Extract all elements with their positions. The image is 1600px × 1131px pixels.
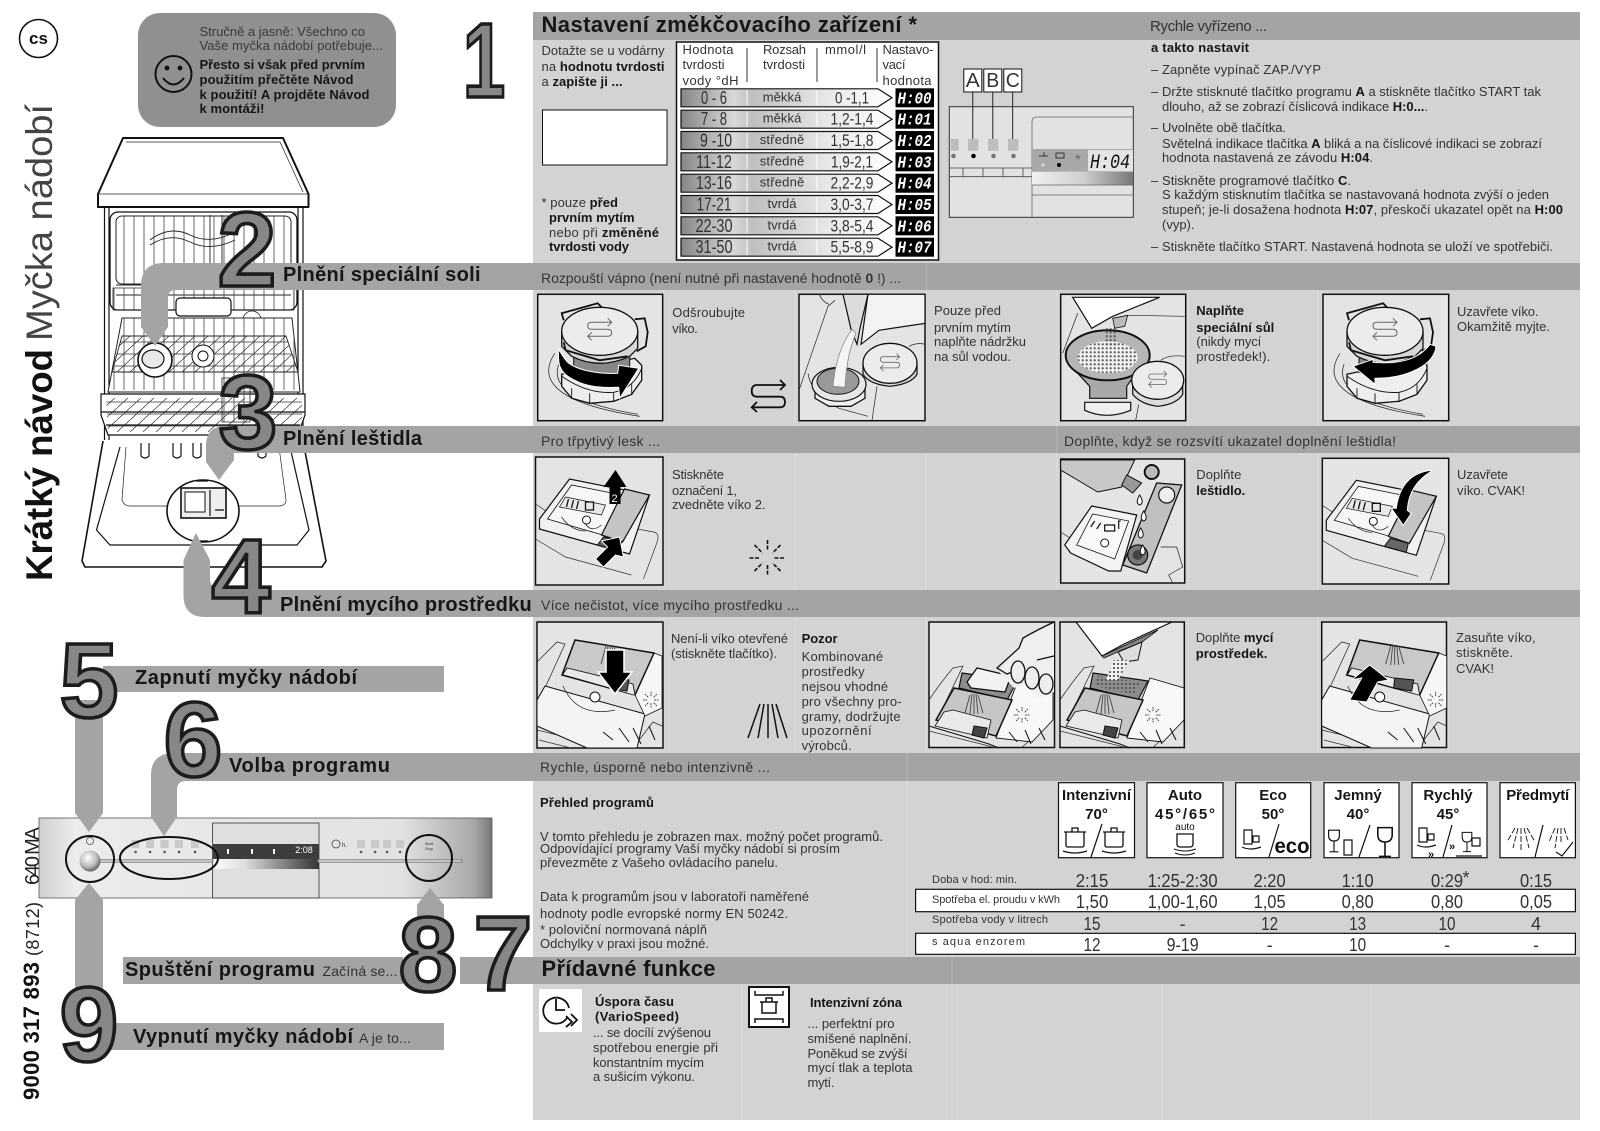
row: aqua sensor: - xyxy=(1267,935,1273,955)
step: open rinse aid lid: Stiskněte xyxy=(672,467,724,482)
program overview text: V tomto přehledu je zobrazen max. možný počet programů. xyxy=(540,829,883,844)
vertical part number xyxy=(19,826,44,1100)
connector bar: step 3: Plnění leštidla xyxy=(283,428,423,450)
footnote: only before first wash: prvním mytím xyxy=(549,210,634,225)
row: energy: 0,80 xyxy=(1431,892,1463,912)
table row 7-8: 7 - 8 xyxy=(701,109,727,129)
buttons diagram A B C and display: * xyxy=(1075,151,1081,167)
connector bar: step 3: Pro třpytivý lesk ... xyxy=(541,433,660,449)
footnote: only before first wash xyxy=(542,195,659,254)
row: duration: * xyxy=(1462,868,1470,888)
row: duration: 1:10 xyxy=(1342,871,1374,891)
text: ask the water company: a zapište ji ... xyxy=(542,74,622,89)
step: close rinse aid lid: víko. CVAK! xyxy=(1457,483,1525,498)
table row 11-12: 11-12 xyxy=(696,152,732,172)
connector bar: step 8 xyxy=(123,888,444,984)
program overview text: * poloviční normovaná náplň xyxy=(540,922,707,937)
illustration: water pouring xyxy=(799,294,925,421)
table row 0-6 xyxy=(681,88,934,109)
vertical part number: (8712) xyxy=(23,902,43,956)
instructions: set softener: Světelná indikace tlačítka A bliká a na číslicové indikaci se zobrazí xyxy=(1162,136,1542,151)
function: VarioSpeed: ... se docílí zvýšenou xyxy=(593,1025,711,1040)
row: water: 12 xyxy=(1261,914,1278,934)
warning text: combined detergents: nejsou vhodné xyxy=(802,679,888,694)
row: aqua sensor: 12 xyxy=(1084,935,1100,955)
callout: read the manuals: k použití! A projděte Návod xyxy=(200,87,370,102)
step: fill with water: Pouze před xyxy=(934,303,1001,318)
row: duration: 2:15 xyxy=(1076,871,1108,891)
instructions: set softener: Stiskněte programové tlačítko C. xyxy=(1162,173,1351,188)
step: close cap: Uzavřete víko. xyxy=(1457,304,1538,319)
program: Rychlý xyxy=(1412,783,1487,861)
header bar: softener: Rychle vyřízeno ... xyxy=(1150,18,1267,35)
table row 22-30: 3,8-5,4 xyxy=(830,216,874,235)
icon: intensive zone xyxy=(749,987,789,1027)
label C: C xyxy=(1006,70,1020,92)
step: fill special salt xyxy=(1061,294,1274,421)
program: Auto: Auto xyxy=(1168,787,1202,804)
instructions: set softener: – xyxy=(1151,84,1159,99)
program: Rychlý: 45° xyxy=(1437,806,1459,823)
table row 7-8: 1,2-1,4 xyxy=(830,110,874,129)
connector bar: step 3: Doplňte, když se rozsvítí ukazatel doplnění leštidla! xyxy=(1064,433,1396,449)
row: duration xyxy=(1076,868,1552,891)
table row 13-16: 13-16 xyxy=(696,173,732,193)
panel backgrounds xyxy=(533,40,1580,1120)
program: Předmytí xyxy=(1500,783,1575,858)
step: close rinse aid lid xyxy=(1322,458,1525,584)
function: intensive zone xyxy=(749,987,913,1090)
step: open detergent lid: Není-li víko otevřené xyxy=(671,631,788,646)
note box xyxy=(542,110,667,165)
table row 22-30: 22-30 xyxy=(696,216,732,236)
step: fill with water: naplňte nádržku xyxy=(934,334,1026,349)
program: Jemný xyxy=(1324,783,1399,858)
instructions: set softener: stupeň; je-li dosažena hodnota H:07, přeskočí ukazatel opět na H:00 xyxy=(1162,202,1563,217)
function: VarioSpeed: (VarioSpeed) xyxy=(595,1009,679,1024)
header bar: softener xyxy=(533,12,1580,40)
program: Auto xyxy=(1147,783,1223,858)
row: duration: 2:20 xyxy=(1254,871,1286,891)
row: energy: 1,50 xyxy=(1076,892,1108,912)
warning text: combined detergents: upozornění xyxy=(802,723,872,738)
program: Intenzivní: 70° xyxy=(1085,806,1108,823)
number 4: 4 xyxy=(212,518,271,636)
step: fill special salt: Naplňte xyxy=(1196,303,1244,318)
connector bar: step 9 xyxy=(75,883,444,1050)
header bar: softener: Nastavení změkčovacího zařízení * xyxy=(542,12,917,37)
table row 11-12: 1,9-2,1 xyxy=(831,152,873,171)
function: VarioSpeed: konstantním mycím xyxy=(593,1055,704,1070)
control panel: Stop xyxy=(425,846,434,851)
step: close detergent lid xyxy=(1322,622,1536,748)
vertical part number: 9000 317 893 xyxy=(19,962,44,1100)
number 1: 1 xyxy=(463,1,505,120)
footnote: only before first wash: * pouze před xyxy=(542,195,618,210)
buttons diagram A B C and display xyxy=(949,69,1133,217)
callout: read the manuals: Vaše myčka nádobí potřebuje... xyxy=(200,38,383,53)
table row 7-8: měkká xyxy=(763,111,802,126)
illustration: rinse aid lid with arrows: 2 xyxy=(612,493,618,505)
step: fill special salt: speciální sůl xyxy=(1196,320,1274,335)
table row 9-10 xyxy=(681,130,934,152)
table row 13-16: 2,2-2,9 xyxy=(830,174,874,193)
warning text: combined detergents: Kombinované xyxy=(802,649,883,664)
step: open rinse aid lid xyxy=(536,457,766,585)
instructions: set softener: hodnota nastavená ze závodu H:04. xyxy=(1162,150,1373,165)
row: duration: 0:15 xyxy=(1520,871,1552,891)
connector bar: step 8: Spuštění programu xyxy=(125,959,315,981)
row: aqua sensor xyxy=(1084,935,1539,955)
instructions: set softener: S každým stisknutím tlačítka se nastavovaná hodnota zvýší o jeden xyxy=(1162,187,1549,202)
step: fill with water: na sůl vodou. xyxy=(934,349,1011,364)
row: duration: 0:29 xyxy=(1431,871,1463,891)
table row 17-21: 17-21 xyxy=(696,194,732,214)
water hardness table: tvrdosti xyxy=(763,57,805,72)
step: close detergent lid: CVAK! xyxy=(1456,661,1494,676)
step: add detergent xyxy=(1060,622,1274,748)
step: fill with water: prvním mytím xyxy=(934,320,1011,335)
water hardness table: tvrdosti xyxy=(682,57,725,72)
row: duration: 1:25-2:30 xyxy=(1148,871,1218,891)
instructions: set softener: – xyxy=(1151,62,1159,77)
warning text: combined detergents: pro všechny pro- xyxy=(802,694,902,709)
table row 31-50: tvrdá xyxy=(768,239,797,254)
water hardness table: vací xyxy=(882,57,906,72)
icon: salt symbol xyxy=(752,380,785,412)
program: Rychlý: Rychlý xyxy=(1423,787,1473,804)
step: close detergent lid: stiskněte. xyxy=(1456,645,1513,660)
step: open detergent lid: (stiskněte tlačítko). xyxy=(671,646,777,661)
program data table xyxy=(916,868,1575,955)
illustration: funnel with salt xyxy=(1061,294,1186,421)
function: intensive zone: Intenzivní zóna xyxy=(810,995,903,1010)
big step numbers xyxy=(60,1,532,1084)
function: intensive zone: mycí tlak a teplota xyxy=(808,1060,913,1075)
instructions: set softener: – xyxy=(1151,120,1159,135)
footnote: only before first wash: tvrdosti vody xyxy=(549,239,630,254)
row: aqua sensor: - xyxy=(1444,935,1450,955)
water hardness table: vody °dH xyxy=(682,73,738,88)
text: ask the water company xyxy=(542,43,665,89)
step: unscrew cap: víko. xyxy=(672,321,698,336)
table row 17-21: 3,0-3,7 xyxy=(830,195,874,214)
row: aqua sensor: 10 xyxy=(1349,935,1366,955)
program: Eco: Eco xyxy=(1259,787,1287,804)
warning text: combined detergents: Pozor xyxy=(802,631,838,646)
table row 22-30: tvrdá xyxy=(768,217,797,232)
step: close cap xyxy=(1323,294,1550,421)
control panel: h. xyxy=(342,843,347,849)
row: energy: 0,80 xyxy=(1342,892,1374,912)
step: unscrew cap xyxy=(538,294,745,421)
table row 22-30 xyxy=(681,216,934,237)
control panel: 2:08 xyxy=(295,845,313,855)
program overview text: Odpovídající programy Vaší myčky nádobí si prosím xyxy=(540,841,840,856)
number 5: 5 xyxy=(60,622,118,740)
connector bar: step 5 xyxy=(75,666,444,832)
function: VarioSpeed: spotřebou energie při xyxy=(593,1040,718,1055)
header bar: additional functions (step 7): Přídavné funkce xyxy=(542,956,716,981)
table row 17-21 xyxy=(681,194,934,216)
number 7: 7 xyxy=(474,895,532,1013)
program overview text: hodnoty podle evropské normy EN 50242. xyxy=(540,906,788,921)
table row 22-30: H:06 xyxy=(898,218,932,237)
table row 11-12: středně xyxy=(760,153,804,168)
label A: A xyxy=(966,70,980,92)
instructions: set softener: Zapněte vypínač ZAP./VYP xyxy=(1162,62,1321,77)
callout: read the manuals: použitím přečtěte Návod xyxy=(200,72,354,87)
callout: read the manuals: Stručně a jasně: Všechno co xyxy=(200,24,365,39)
control panel: Start xyxy=(425,841,434,846)
icon: detergent fan lines xyxy=(748,704,787,738)
function: intensive zone: ... perfektní pro xyxy=(808,1016,894,1031)
program: Jemný: 40° xyxy=(1347,806,1369,823)
connector bar: step 2 xyxy=(141,263,1580,346)
connector bar: step 6 xyxy=(151,753,1580,836)
connector bar: step 2: Plnění speciální soli xyxy=(283,264,481,286)
illustration: opening salt cap xyxy=(538,294,663,421)
water hardness table: Nastavo- xyxy=(882,42,934,57)
vertical title: Krátký návod xyxy=(19,349,60,581)
connector bar: step 4 xyxy=(184,533,1580,617)
illustration: press lid arrow xyxy=(537,622,663,748)
step: add rinse aid: Doplňte xyxy=(1196,467,1241,482)
function: intensive zone: Poněkud se zvýší xyxy=(808,1046,908,1061)
step: fill with water xyxy=(799,294,1026,421)
step: open rinse aid lid: označení 1, xyxy=(672,483,737,498)
connector bar: step 8: Začíná se... xyxy=(322,963,398,979)
number 3: 3 xyxy=(219,354,277,472)
table row 17-21: H:05 xyxy=(898,197,932,216)
step: unscrew cap: Odšroubujte xyxy=(672,305,745,320)
connector bar: step 5: Zapnutí myčky nádobí xyxy=(135,667,358,689)
icon: smiley xyxy=(156,56,192,92)
instructions: set softener: – xyxy=(1151,173,1159,188)
row: energy: 1,00-1,60 xyxy=(1148,892,1218,912)
program: Intenzivní xyxy=(1058,783,1134,858)
buttons diagram A B C and display: H:04 xyxy=(1090,152,1130,175)
water hardness table: hodnota xyxy=(882,73,932,88)
row: aqua sensor: - xyxy=(1533,935,1539,955)
water hardness table: Rozsah xyxy=(763,42,806,57)
program: Eco: 50° xyxy=(1262,806,1284,823)
warning text: combined detergents: výrobců. xyxy=(802,738,852,753)
program overview text: Přehled programů xyxy=(540,795,654,810)
table row 17-21: tvrdá xyxy=(768,196,797,211)
program: Rychlý: » xyxy=(1428,849,1434,861)
step: add rinse aid: leštidlo. xyxy=(1196,483,1245,498)
program: Jemný: Jemný xyxy=(1334,787,1382,804)
callout: read the manuals: Přesto si však před prvním xyxy=(200,57,365,72)
step: fill special salt: (nikdy mycí xyxy=(1196,334,1262,349)
step: close detergent lid: Zasuňte víko, xyxy=(1456,630,1536,645)
program: Eco: eco xyxy=(1274,835,1310,858)
dishwasher illustration xyxy=(82,138,326,567)
table row 0-6: H:00 xyxy=(898,90,932,109)
program: Eco xyxy=(1236,783,1311,858)
table row 11-12 xyxy=(681,152,934,173)
connector bar: step 6: Volba programu xyxy=(229,755,390,777)
number 6: 6 xyxy=(164,681,222,799)
table row 9-10: 1,5-1,8 xyxy=(830,131,874,150)
table row 11-12: H:03 xyxy=(898,154,932,173)
table row 9-10: 9 -10 xyxy=(700,130,732,150)
illustration: slide lid closed xyxy=(1322,622,1447,748)
instructions: set softener: a takto nastavit xyxy=(1151,40,1250,55)
program data table: Spotřeba vody v litrech xyxy=(932,914,1048,926)
step: add detergent: Doplňte mycí xyxy=(1196,630,1274,645)
table row 7-8: H:01 xyxy=(898,112,932,131)
instructions: set softener: dlouho, až se zobrazí číslicová indikace H:0.... xyxy=(1162,99,1428,114)
step: add detergent: prostředek. xyxy=(1196,646,1267,661)
table row 13-16: H:04 xyxy=(898,176,932,195)
step: close rinse aid lid: Uzavřete xyxy=(1457,467,1508,482)
program: Auto: 45°/65° xyxy=(1155,806,1215,823)
step: open detergent lid xyxy=(537,622,788,748)
program overview text: Data k programům jsou v laboratoři naměřené xyxy=(540,889,809,904)
icon: clock with arrows xyxy=(539,989,582,1032)
step: close cap: Okamžitě myjte. xyxy=(1457,319,1550,334)
icon: rinse aid indicator xyxy=(750,540,786,576)
table row 7-8 xyxy=(681,109,934,131)
label B: B xyxy=(986,70,999,92)
program data table: s aqua enzorem xyxy=(932,936,1025,948)
illustration: tablet in hand xyxy=(929,622,1054,748)
row: aqua sensor: 9-19 xyxy=(1167,935,1199,955)
table row 31-50: H:07 xyxy=(898,240,932,259)
instructions: set softener: – xyxy=(1151,239,1159,254)
instructions: set softener: (vyp). xyxy=(1162,217,1194,232)
vertical title xyxy=(19,103,60,581)
illustration: closing salt cap xyxy=(1323,294,1449,421)
illustration: closing lid with curved arrow xyxy=(1322,458,1449,584)
language badge: cs xyxy=(20,20,58,58)
water hardness table: mmol/l xyxy=(825,42,866,57)
number 9: 9 xyxy=(60,966,118,1084)
number 8: 8 xyxy=(399,896,457,1014)
vertical part number: 640 MA xyxy=(22,826,44,885)
instructions: set softener: Uvolněte obě tlačítka. xyxy=(1162,120,1286,135)
table row 31-50: 5,5-8,9 xyxy=(830,238,874,257)
function: VarioSpeed: a sušicím výkonu. xyxy=(593,1069,695,1084)
warning text: combined detergents xyxy=(802,631,902,753)
warning text: combined detergents: gramy, dodržujte xyxy=(802,709,901,724)
illustration: rinse aid lid with arrows xyxy=(536,457,663,585)
vertical title: Myčka nádobí xyxy=(19,103,60,341)
step: add rinse aid xyxy=(1061,459,1245,583)
table row 9-10: středně xyxy=(760,132,804,147)
function: intensive zone: smíšené naplnění. xyxy=(808,1031,912,1046)
instructions: set softener: Stiskněte tlačítko START. Nastavená hodnota se uloží ve spotřebiči. xyxy=(1162,239,1553,254)
program: Předmytí: Předmytí xyxy=(1506,787,1570,804)
row: water: 10 xyxy=(1438,914,1456,934)
program: Intenzivní: Intenzivní xyxy=(1062,787,1132,804)
connector bar: step 9: A je to... xyxy=(359,1030,411,1046)
program data table: Spotřeba el. proudu v kWh xyxy=(932,894,1060,906)
function: VarioSpeed xyxy=(539,989,718,1084)
table row 31-50 xyxy=(681,237,934,259)
program: Rychlý: » xyxy=(1449,841,1455,853)
function: intensive zone: mytí. xyxy=(808,1075,834,1090)
connector bar: step 2: Rozpouští vápno (není nutné při nastavené hodnotě 0 !) ... xyxy=(541,270,901,286)
program overview text: převezměte z Vašeho ovládacího panelu. xyxy=(540,855,778,870)
row: water: 13 xyxy=(1349,914,1366,934)
water hardness table: Hodnota xyxy=(682,42,734,57)
row: energy xyxy=(1076,892,1552,912)
footnote: only before first wash: nebo při změněné xyxy=(549,225,659,240)
callout: read the manuals xyxy=(138,13,396,127)
row: water: - xyxy=(1180,914,1186,934)
step: open rinse aid lid: zvedněte víko 2. xyxy=(672,497,766,512)
connector bar: step 4: Plnění mycího prostředku xyxy=(280,594,532,616)
row: water: 15 xyxy=(1084,914,1100,934)
header bar: additional functions (step 7) xyxy=(460,956,1580,984)
connector bar: step 9: Vypnutí myčky nádobí xyxy=(133,1026,354,1048)
illustration: bottle pouring rinse aid xyxy=(1061,459,1185,583)
control panel xyxy=(39,818,492,898)
program overview text: Odchylky v praxi jsou možné. xyxy=(540,936,709,951)
step: fill special salt: prostředek!). xyxy=(1196,349,1270,364)
connector bar: step 4: Více nečistot, více mycího prostředku ... xyxy=(541,597,799,613)
row: energy: 0,05 xyxy=(1520,892,1552,912)
callout: read the manuals: k montáži! xyxy=(200,101,264,116)
row: energy: 1,05 xyxy=(1254,892,1286,912)
table row 0-6: 0 -1,1 xyxy=(835,88,869,107)
table row 0-6: měkká xyxy=(763,89,802,104)
text: ask the water company: Dotažte se u vodárny xyxy=(542,43,665,58)
number 2: 2 xyxy=(218,191,276,309)
table row 13-16 xyxy=(681,173,934,195)
warning text: combined detergents: prostředky xyxy=(802,664,865,679)
table row 13-16: středně xyxy=(760,175,804,190)
row: water xyxy=(1084,914,1541,934)
program data table: Doba v hod: min. xyxy=(932,874,1017,886)
row: water: 4 xyxy=(1531,914,1541,934)
table row 31-50: 31-50 xyxy=(696,237,732,257)
connector bar: step 6: Rychle, úsporně nebo intenzivně ... xyxy=(540,759,770,775)
table row 9-10: H:02 xyxy=(898,133,932,152)
table row 0-6: 0 - 6 xyxy=(701,88,727,108)
language badge: cs: cs xyxy=(29,29,48,48)
function: VarioSpeed: Úspora času xyxy=(595,994,674,1009)
text: ask the water company: na hodnotu tvrdosti xyxy=(542,59,664,74)
instructions: set softener xyxy=(1151,40,1563,254)
program: Auto: auto xyxy=(1175,822,1195,833)
illustration: powder into compartment xyxy=(1060,622,1184,748)
instructions: set softener: Držte stisknuté tlačítko programu A a stiskněte tlačítko START tak xyxy=(1162,84,1542,99)
connector bar: step 3 xyxy=(206,426,1580,480)
program overview text xyxy=(540,795,883,951)
water hardness table xyxy=(676,42,938,260)
